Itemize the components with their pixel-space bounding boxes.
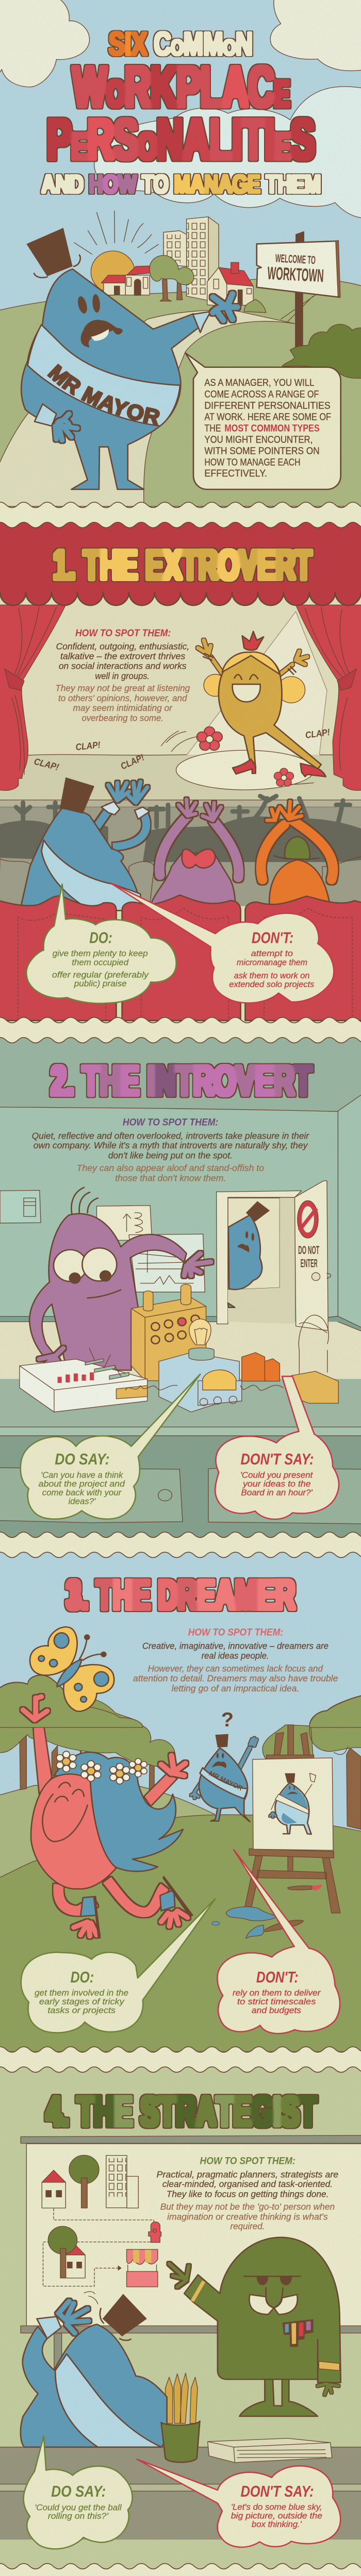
purple character from behind [150, 800, 239, 907]
don't bubble [217, 1850, 340, 2033]
trees [150, 256, 194, 301]
spotlight beam [179, 612, 327, 765]
do say bubble [21, 1374, 200, 1519]
dreamer raised hand [23, 1697, 47, 1720]
how to spot: extrovert: HOW TO SPOT THEM: [75, 628, 171, 639]
don't say bubble [215, 1376, 339, 1519]
do say bubble: come back with your [42, 1488, 122, 1498]
stack of books [208, 2438, 332, 2463]
canopy top [0, 1675, 361, 1727]
dreamer title: 3. THE DREAMER [66, 1571, 295, 1618]
top right cloud [270, 0, 361, 71]
intro speech bubble: MOST COMMON TYPES [224, 423, 320, 434]
towers [163, 217, 219, 300]
intro speech bubble [185, 353, 341, 489]
stage rail [0, 800, 361, 807]
don't bubble: DON'T: [256, 1968, 299, 1986]
title [41, 25, 321, 198]
how to spot: strategist [157, 2156, 339, 2231]
small bush [244, 299, 266, 313]
clap labels [33, 726, 331, 772]
title line: personalities: PERSONALITIES [47, 107, 315, 172]
small mayor [191, 1734, 257, 1822]
dreamer character [31, 1717, 193, 1938]
stage floor [0, 755, 361, 801]
don't bubble: DON'T: [252, 929, 293, 946]
don't bubble: extended solo projects [229, 979, 314, 989]
how to spot: dreamer: attention to detail. Dreamers may also have trouble [133, 1673, 338, 1684]
orange character from behind [261, 802, 333, 907]
canvas painting [253, 1758, 333, 1850]
do say bubble [24, 2436, 133, 2549]
don't say bubble: 'Let's do some blue sky, [231, 2502, 322, 2512]
don't say bubble: box thinking.' [252, 2519, 302, 2529]
strategist character [169, 2238, 341, 2416]
flower [274, 768, 293, 786]
how to spot: introvert: own company. While it's a myth that introverts are naturally shy, they [34, 1141, 308, 1150]
wall papers [0, 1190, 205, 1292]
how to spot: dreamer: However, they can sometimes lack focus and [148, 1664, 323, 1673]
how to spot: extrovert: overbearing to some. [81, 713, 163, 723]
intro speech bubble: AT WORK. HERE ARE SOME OF [204, 412, 331, 422]
desk [0, 2447, 361, 2539]
door: DO NOT [298, 1243, 319, 1257]
motion lines [161, 731, 314, 784]
panel: hero scene [0, 0, 361, 507]
panel: 1 the extrovert [0, 513, 361, 1030]
how to spot: strategist: imagination or creative thinking is what's [167, 2212, 328, 2222]
how to spot: introvert: They can also appear aloof and stand-offish to [77, 1163, 264, 1173]
don't bubble: attempt to [251, 949, 293, 958]
introvert title: 2. THE INTROVERT [51, 1057, 312, 1104]
do bubble: give them plenty to keep [53, 949, 148, 958]
pencil cup [161, 2421, 200, 2462]
how to spot: strategist: HOW TO SPOT THEM: [200, 2156, 296, 2167]
door [217, 1181, 331, 1331]
do bubble: them occupied [72, 958, 129, 967]
do bubble: DO: [71, 1968, 94, 1986]
don't say bubble: 'Could you present [240, 1470, 314, 1480]
curtains [0, 605, 361, 790]
how to spot: dreamer: Creative, imaginative, innovative – dreamers are [142, 1641, 329, 1651]
town plan icons [42, 2155, 161, 2287]
theatre seats [0, 895, 361, 1021]
how to spot: dreamer: real ideas people. [202, 1651, 269, 1661]
paint splat and brushes [212, 1885, 322, 1938]
mayor from behind [21, 777, 150, 910]
panel: 4 the strategist [0, 2061, 361, 2576]
back hill [0, 1785, 214, 1885]
middle cloud [94, 87, 361, 218]
panel: 3 the dreamer [0, 1546, 361, 2061]
whiteboard [21, 2136, 361, 2370]
how to spot: extrovert: to others' opinions, however, and [58, 693, 188, 703]
how to spot: strategist: clear-minded, organised and task-oriented. [162, 2179, 333, 2189]
don't say bubble: DON'T SAY: [241, 1450, 314, 1468]
houses [101, 262, 253, 306]
intro speech bubble: AS A MANAGER, YOU WILL [204, 377, 314, 388]
do bubble: public) praise [74, 979, 127, 989]
mr mayor: MR MAYOR [47, 364, 160, 425]
title line: workplace: WORKPLACE [73, 55, 290, 120]
how to spot: strategist: They like to focus on getting things done. [167, 2189, 329, 2199]
how to spot: introvert [32, 1117, 309, 1183]
how to spot: strategist: Practical, pragmatic planners, strategists are [157, 2170, 339, 2179]
intro speech bubble: HOW TO MANAGE EACH [204, 457, 301, 468]
how to spot: extrovert: Confident, outgoing, enthusiastic, [56, 641, 189, 651]
strategist title: 4. THE STRATEGIST [46, 2088, 317, 2135]
audience silhouettes [0, 796, 361, 862]
don't bubble [110, 883, 334, 1003]
don't say bubble [137, 2459, 340, 2547]
mayor peeking [228, 1201, 270, 1308]
how to spot: dreamer: letting go of an impractical idea. [172, 1683, 299, 1693]
do say bubble: DO SAY: [51, 2483, 106, 2500]
don't say bubble: DON'T SAY: [241, 2483, 314, 2500]
do bubble: offer regular (preferably [52, 970, 150, 980]
don't bubble: ask them to work on [234, 971, 309, 980]
welcome sign: WELCOME TO [275, 251, 316, 266]
mayor from behind [21, 2292, 167, 2447]
top left cloud [0, 0, 90, 87]
how to spot: extrovert [55, 628, 190, 723]
ground hills [0, 278, 361, 506]
tree trunks [20, 1731, 361, 1829]
flower [196, 727, 222, 750]
extrovert character [198, 631, 326, 777]
how to spot: introvert: Quiet, reflective and often overlooked, introverts take pleasure in their [32, 1131, 309, 1141]
how to spot: strategist: required. [230, 2222, 265, 2231]
how to spot: extrovert: well in groups. [95, 671, 150, 681]
do bubble: DO: [89, 929, 112, 946]
intro speech bubble: COME ACROSS A RANGE OF [204, 389, 319, 400]
lab machine [20, 1284, 338, 1412]
intro speech bubble: DIFFERENT PERSONALITIES [204, 400, 331, 411]
don't say bubble: big picture, outside the [231, 2511, 322, 2520]
do bubble: get them involved in the [35, 1988, 128, 1997]
intro speech bubble: THE [204, 423, 221, 434]
intro speech bubble: YOU MIGHT ENCOUNTER, [204, 434, 313, 446]
intro speech bubble: WITH SOME POINTERS ON [204, 446, 320, 456]
do say bubble: DO SAY: [55, 1450, 110, 1468]
flower crown [56, 1751, 147, 1784]
how to spot: extrovert: on social interactions and works [59, 661, 187, 671]
how to spot: introvert: HOW TO SPOT THEM: [123, 1117, 218, 1128]
road [0, 310, 294, 506]
don't bubble: and budgets [252, 2006, 301, 2015]
desk front [0, 1427, 361, 1541]
do say bubble: about the project and [39, 1479, 125, 1488]
title line: six common: SIX COMMON [109, 25, 253, 62]
how to spot: extrovert: may seem intimidating or [73, 703, 173, 713]
how to spot: extrovert: talkative – the extrovert thrives [60, 651, 186, 661]
left tree canopy [0, 1675, 175, 1767]
how to spot: dreamer: HOW TO SPOT THEM: [188, 1627, 283, 1638]
butterfly [30, 1627, 114, 1711]
pencils [166, 2373, 198, 2424]
mr mayor [21, 228, 241, 490]
small mayor: MR MAYOR [208, 1769, 244, 1792]
door: ENTER [301, 1257, 318, 1269]
do say bubble: 'Can you have a think [41, 1470, 123, 1480]
how to spot: introvert: those that don't know them. [115, 1173, 226, 1183]
how to spot: introvert: don't like being put on the spot. [108, 1150, 233, 1160]
don't bubble: micromanage them [237, 958, 307, 967]
introvert character [29, 1188, 210, 1370]
spotlight pool [176, 750, 314, 790]
don't bubble: to strict timescales [237, 1997, 316, 2006]
front hill [0, 1815, 361, 2052]
sun and rays [74, 211, 158, 293]
ceiling [0, 1031, 361, 1111]
panel: 2 the introvert [0, 1030, 361, 1546]
clap labels: CLAP! [119, 752, 146, 771]
do say bubble: ideas?' [69, 1497, 96, 1506]
big bush [282, 324, 361, 378]
welcome sign [257, 232, 340, 348]
extrovert title: 1. THE EXTROVERT [53, 541, 312, 588]
how to spot: strategist: But they may not be the 'go-to' person when [160, 2202, 335, 2212]
don't say bubble: your ideas to the [242, 1479, 311, 1488]
title line: and how to manage them: AND HOW TO MANAGE THEM [41, 169, 321, 198]
don't bubble: rely on them to deliver [233, 1988, 321, 1997]
desk floor start [0, 1379, 361, 1428]
do say bubble: rolling on this?' [48, 2511, 109, 2521]
do say bubble: 'Could you get the ball [35, 2503, 122, 2512]
do bubble: tasks or projects [47, 2006, 116, 2015]
easel [245, 1725, 340, 1913]
do bubble [26, 884, 176, 1004]
question mark: ? [221, 1709, 234, 1731]
floor [0, 1319, 361, 1379]
red valance [0, 513, 361, 605]
do bubble: early stages of tricky [39, 1997, 125, 2006]
don't say bubble: Board in an hour?' [241, 1488, 313, 1498]
do bubble [21, 1899, 215, 2033]
right tree canopy [262, 1695, 361, 1764]
clap labels: CLAP! [33, 756, 60, 772]
how to spot: dreamer [133, 1627, 338, 1693]
clap labels: CLAP! [304, 726, 331, 740]
clap labels: CLAP! [75, 739, 101, 752]
intro speech bubble: EFFECTIVELY. [204, 468, 267, 479]
how to spot: extrovert: They may not be great at listening [55, 683, 190, 693]
